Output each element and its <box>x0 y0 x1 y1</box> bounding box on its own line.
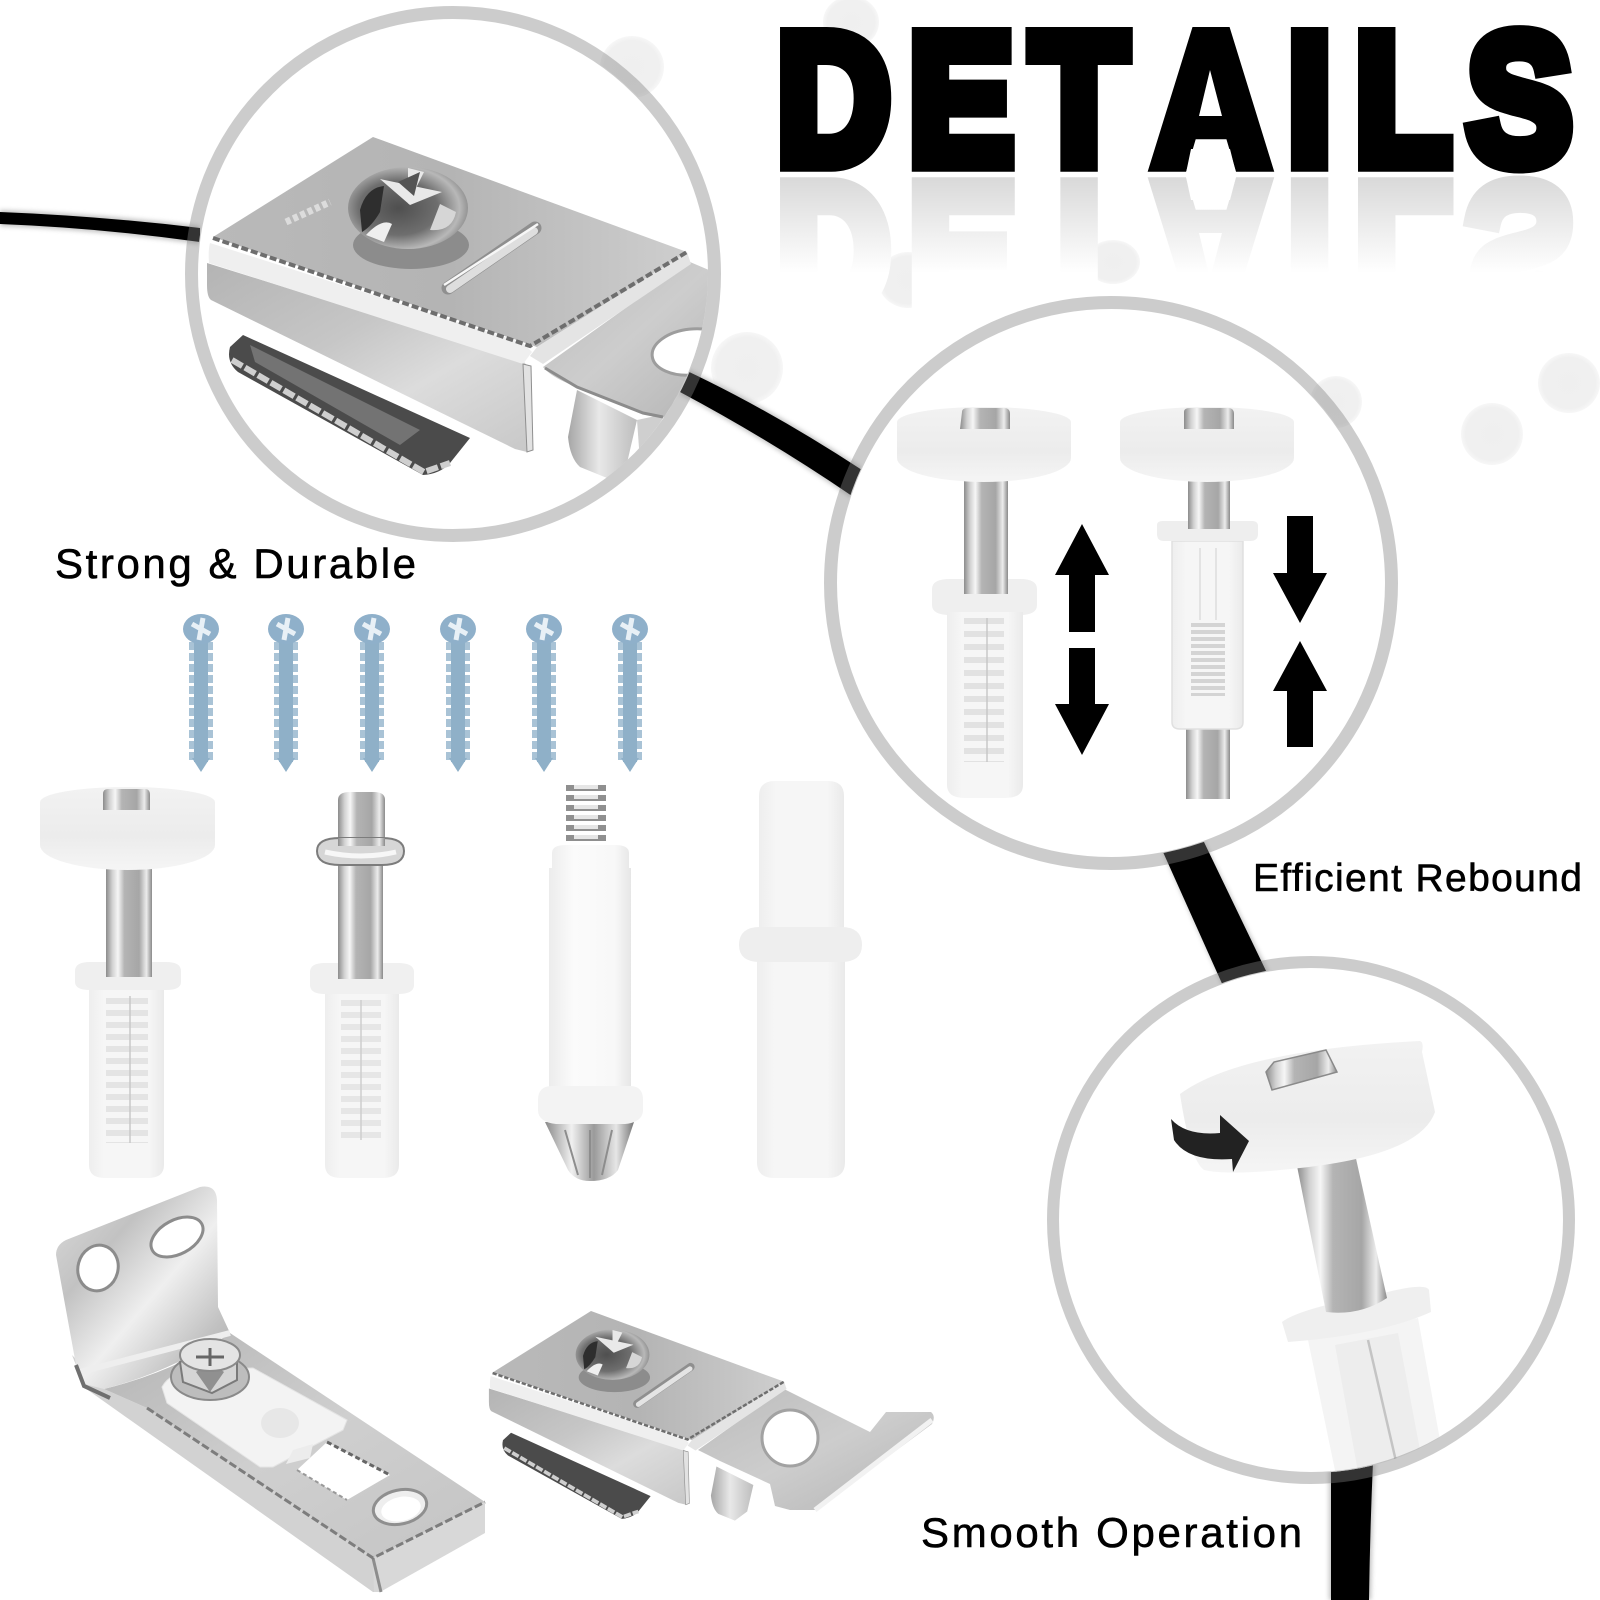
arm top face <box>104 1333 485 1558</box>
hex nut and screw <box>171 1339 249 1400</box>
part: clamp bracket <box>489 1311 934 1521</box>
nylon block <box>162 1368 347 1467</box>
cap <box>897 407 1071 482</box>
part: L bracket <box>56 1187 485 1592</box>
side face <box>72 1355 381 1592</box>
lower shaft <box>1186 725 1230 799</box>
screw 1 <box>183 614 219 772</box>
screw hole <box>370 1485 430 1529</box>
shaft <box>1297 1154 1387 1313</box>
front face <box>207 263 531 452</box>
pin head <box>960 408 1010 429</box>
label: Strong & Durable: Strong & Durable <box>55 540 416 587</box>
compressed plunger <box>1120 407 1294 799</box>
arrow: down <box>1055 648 1109 755</box>
sleeve <box>1308 1318 1440 1480</box>
decorative pale dots <box>600 0 1600 465</box>
rear tab with hole <box>543 262 716 418</box>
connecting cable <box>0 210 1375 1600</box>
clamp close-up <box>207 137 734 478</box>
arrow: inward down <box>1273 516 1327 623</box>
clear sleeve <box>1172 541 1243 729</box>
part: plain white sleeve <box>739 781 862 1178</box>
collar <box>1157 521 1258 541</box>
shaft <box>964 478 1008 596</box>
label: Smooth Operation: Smooth Operation <box>921 1509 1302 1556</box>
end tip <box>373 1502 485 1592</box>
upright <box>56 1187 230 1389</box>
screw 6 <box>612 614 648 772</box>
extended plunger <box>897 407 1071 798</box>
title: DETAILS: DETAILS <box>777 146 1572 352</box>
spring <box>964 618 1004 762</box>
screw 5 <box>526 614 562 772</box>
tab <box>698 1389 934 1510</box>
stamped mark <box>286 202 330 222</box>
collar <box>932 579 1037 615</box>
label: Efficient Rebound: Efficient Rebound <box>1253 857 1582 900</box>
sleeve <box>947 612 1023 798</box>
screw 4 <box>440 614 476 772</box>
spring <box>1358 1466 1372 1469</box>
toothed lower plate <box>229 335 470 475</box>
arrow: rotation <box>1171 1115 1249 1172</box>
bend highlight <box>209 243 532 364</box>
title: DETAILS: DETAILS <box>777 0 1572 203</box>
panel: magnified clamp circle <box>192 12 734 536</box>
ring <box>1053 962 1569 1478</box>
spring <box>1191 623 1225 696</box>
cap <box>1180 1041 1435 1173</box>
screw 2 <box>268 614 304 772</box>
wood screws row <box>183 614 648 772</box>
arrow: up <box>1055 524 1109 632</box>
ring <box>192 12 714 536</box>
upper shaft <box>1188 478 1230 540</box>
pin head <box>1266 1050 1337 1090</box>
arrow: inward up <box>1273 641 1327 747</box>
cap <box>1120 407 1294 482</box>
screw 3 <box>354 614 390 772</box>
hook <box>568 390 637 478</box>
screw <box>348 167 469 269</box>
ring <box>830 302 1392 864</box>
serrated slot <box>297 1442 390 1500</box>
slot <box>448 228 535 288</box>
panel: magnified rebound circle <box>830 302 1392 864</box>
part: threaded white post <box>538 785 643 1181</box>
panel: magnified rotation circle <box>1053 962 1569 1480</box>
clamp body <box>489 1311 787 1521</box>
part: capped spring pin <box>40 787 215 1178</box>
collar <box>1282 1287 1431 1342</box>
tilted plunger <box>1180 1041 1440 1480</box>
top plate <box>213 137 687 347</box>
pin head <box>1184 408 1234 429</box>
part: washer spring pin <box>310 792 414 1178</box>
holes <box>73 1241 123 1295</box>
title: DETAILS <box>777 0 1572 352</box>
